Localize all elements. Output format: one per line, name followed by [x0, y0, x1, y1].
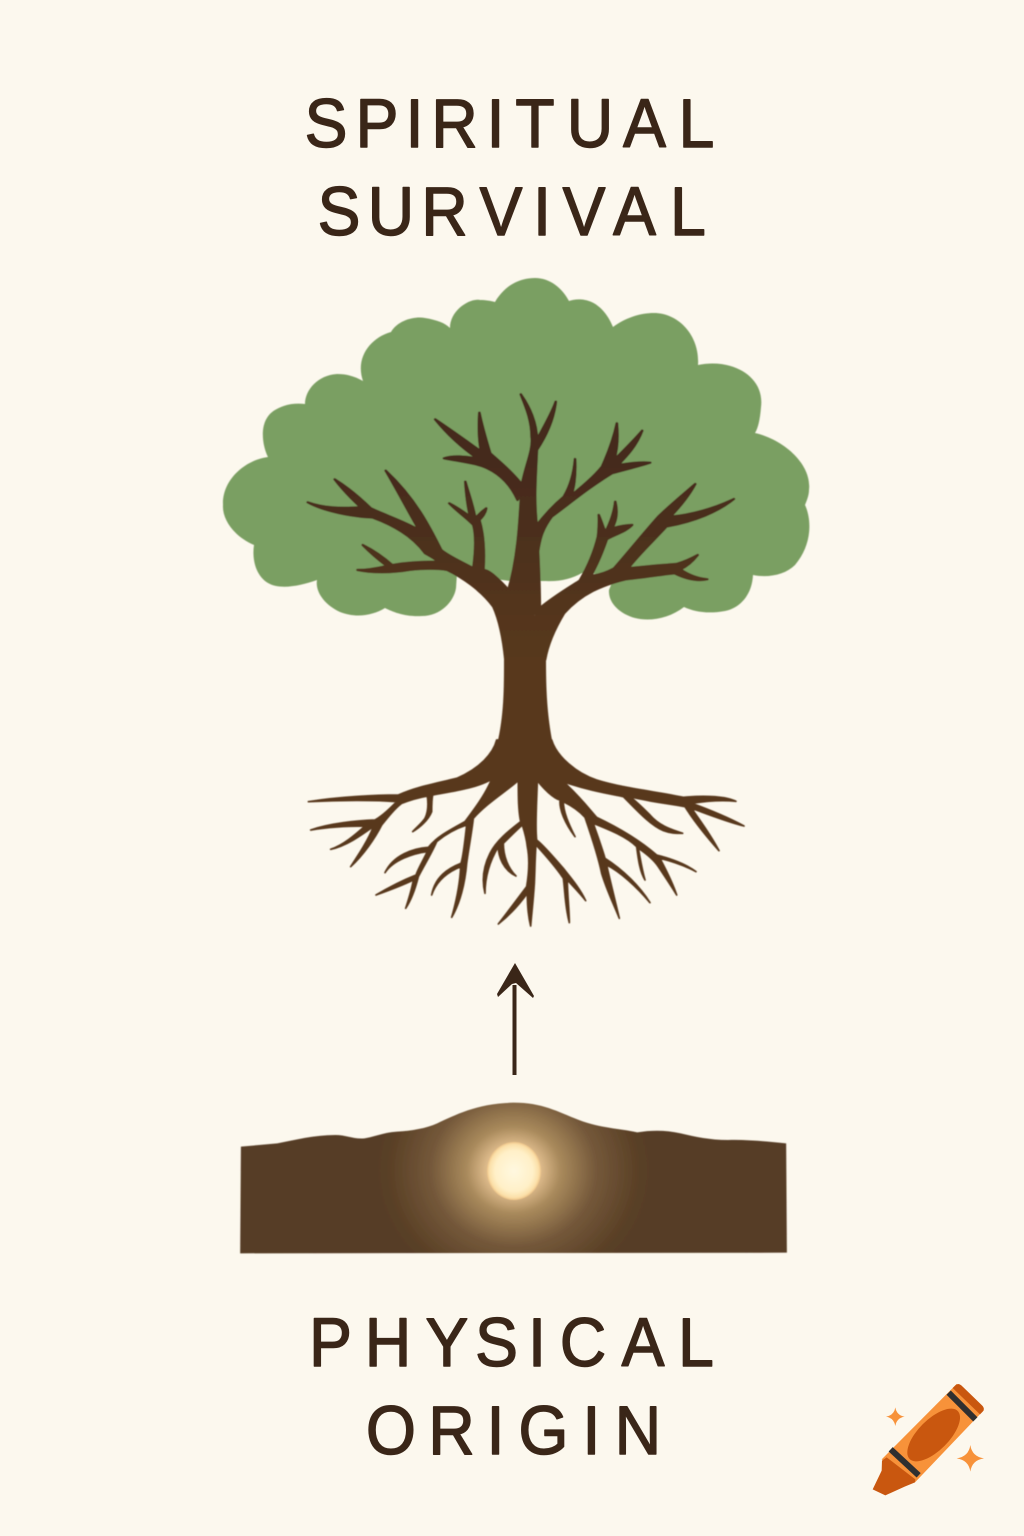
sparkles [886, 1407, 984, 1472]
crayon oval [899, 1400, 969, 1470]
crayon bands [891, 1393, 975, 1475]
title: spiritual survival: SURVIVAL [318, 174, 706, 251]
arrow pointing up [497, 963, 534, 1075]
title: spiritual survival: SPIRITUAL [305, 86, 714, 163]
title: spiritual survival [305, 86, 714, 251]
trunk [497, 658, 553, 745]
title: physical origin: PHYSICAL [309, 1305, 714, 1382]
crayon body [882, 1384, 984, 1482]
icon: crayon logo with sparkles [873, 1384, 984, 1495]
title: physical origin [309, 1305, 714, 1470]
title: physical origin: ORIGIN [366, 1393, 661, 1470]
glowing sun [487, 1142, 541, 1200]
hill [240, 1103, 787, 1253]
foliage canopy [223, 278, 809, 620]
crayon cap [953, 1384, 984, 1414]
tree illustration [223, 278, 809, 926]
crayon tip [873, 1457, 915, 1495]
branches and upper trunk [308, 394, 734, 660]
earth mound with glowing light [240, 1103, 787, 1253]
roots [308, 740, 744, 926]
